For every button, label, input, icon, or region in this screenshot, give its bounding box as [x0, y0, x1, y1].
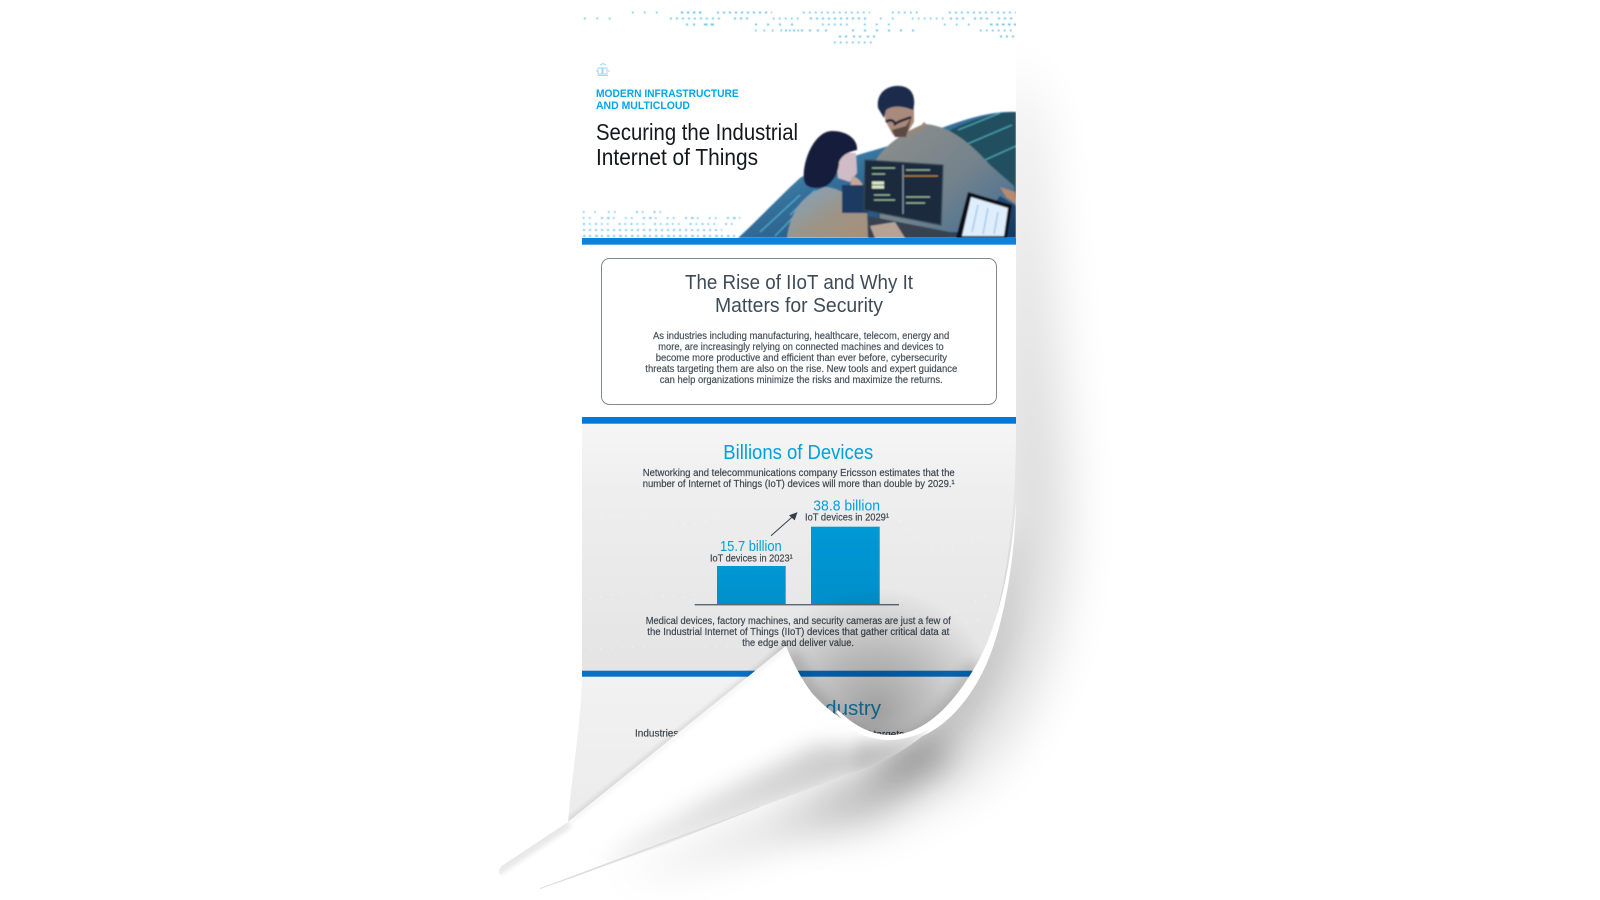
next section text, partly hidden: ct targets	[863, 730, 904, 740]
category label: MODERN INFRASTRUCTURE	[596, 88, 739, 100]
category label	[596, 90, 738, 109]
bar: 2029	[811, 527, 880, 604]
man: hand	[1000, 187, 1016, 204]
wave dark background right	[950, 112, 1016, 193]
data wave	[738, 112, 1016, 238]
man: glasses	[886, 117, 911, 124]
top dot pattern	[584, 12, 1016, 42]
dark panel behind monitor	[842, 185, 868, 213]
billions closing text	[646, 616, 951, 649]
bottom hero dot pattern	[583, 212, 740, 236]
man: hair	[878, 86, 914, 118]
billions closing text: Medical devices, factory machines, and security cameras are just a few of	[646, 616, 951, 627]
flap body	[499, 646, 930, 889]
woman: body	[787, 187, 868, 238]
intro body text: can help organizations minimize the risks and maximize the returns.	[660, 375, 943, 386]
billions intro text	[643, 468, 955, 490]
page sheet	[560, 0, 1030, 840]
label 38.8 billion: 38.8 billion	[813, 497, 880, 514]
man: collar	[906, 123, 925, 133]
curled infographic page	[499, 10, 1084, 889]
intro body text: become more productive and efficient than ever before, cybersecurity	[656, 353, 947, 364]
next section text, partly hidden	[635, 728, 904, 740]
section divider bar 3	[582, 671, 1016, 677]
label 2023: IoT devices in 2023¹	[710, 554, 793, 565]
drop shadow of the page	[600, 60, 1062, 885]
next section heading, partly hidden: Industry	[808, 697, 882, 720]
hero photo: two engineers at monitors	[738, 86, 1016, 238]
billions intro text: number of Internet of Things (IoT) devices will more than double by 2029.¹	[643, 479, 955, 490]
laptop	[956, 192, 1012, 238]
woman: hair	[804, 131, 857, 188]
title: Internet of Things	[596, 144, 758, 170]
lower section background	[568, 676, 969, 822]
man: beard	[892, 116, 912, 137]
man: torso	[876, 124, 1016, 232]
intro heading: The Rise of IIoT and Why It	[685, 272, 913, 294]
section divider bar 2	[582, 417, 1016, 424]
grey section background	[560, 420, 1030, 672]
woman: face	[836, 152, 857, 182]
billions closing text: the edge and deliver value.	[742, 638, 854, 649]
man: neck and face	[884, 106, 915, 136]
header logo icon	[596, 64, 610, 76]
title: Securing the Industrial	[596, 119, 798, 145]
next section text, partly hidden: Industries are	[635, 728, 696, 740]
curl shading on page	[560, 500, 1030, 840]
intro body text: more, are increasingly relying on connected machines and devices to	[658, 342, 944, 353]
billions intro text: Networking and telecommunications company Ericsson estimates that the	[643, 468, 955, 479]
label 15.7 billion: 15.7 billion	[720, 538, 782, 555]
flap shading	[496, 648, 935, 889]
category label: AND MULTICLOUD	[596, 100, 690, 112]
intro heading: Matters for Security	[715, 295, 883, 317]
woman: hand	[849, 176, 864, 186]
bar chart: IoT devices	[695, 497, 899, 605]
label 2029: IoT devices in 2029¹	[805, 513, 890, 524]
growth arrow	[771, 513, 797, 536]
bar: 2023	[717, 566, 786, 604]
billions closing text: the Industrial Internet of Things (IIoT) devices that gather critical data at	[647, 627, 950, 638]
intro body text: threats targeting them are also on the rise. New tools and expert guidance	[645, 364, 958, 375]
section divider bar 1	[582, 238, 1016, 245]
white lip	[836, 500, 1016, 743]
curled flap	[496, 500, 1016, 889]
intro heading	[685, 272, 913, 317]
intro body text: As industries including manufacturing, healthcare, telecom, energy and	[653, 331, 949, 342]
title	[596, 119, 798, 170]
billions heading: Billions of Devices	[723, 441, 873, 464]
keyboard and desk	[868, 216, 962, 238]
monitor	[864, 160, 943, 225]
intro panel	[602, 258, 996, 404]
network texture	[590, 620, 978, 650]
intro body text	[645, 331, 958, 386]
